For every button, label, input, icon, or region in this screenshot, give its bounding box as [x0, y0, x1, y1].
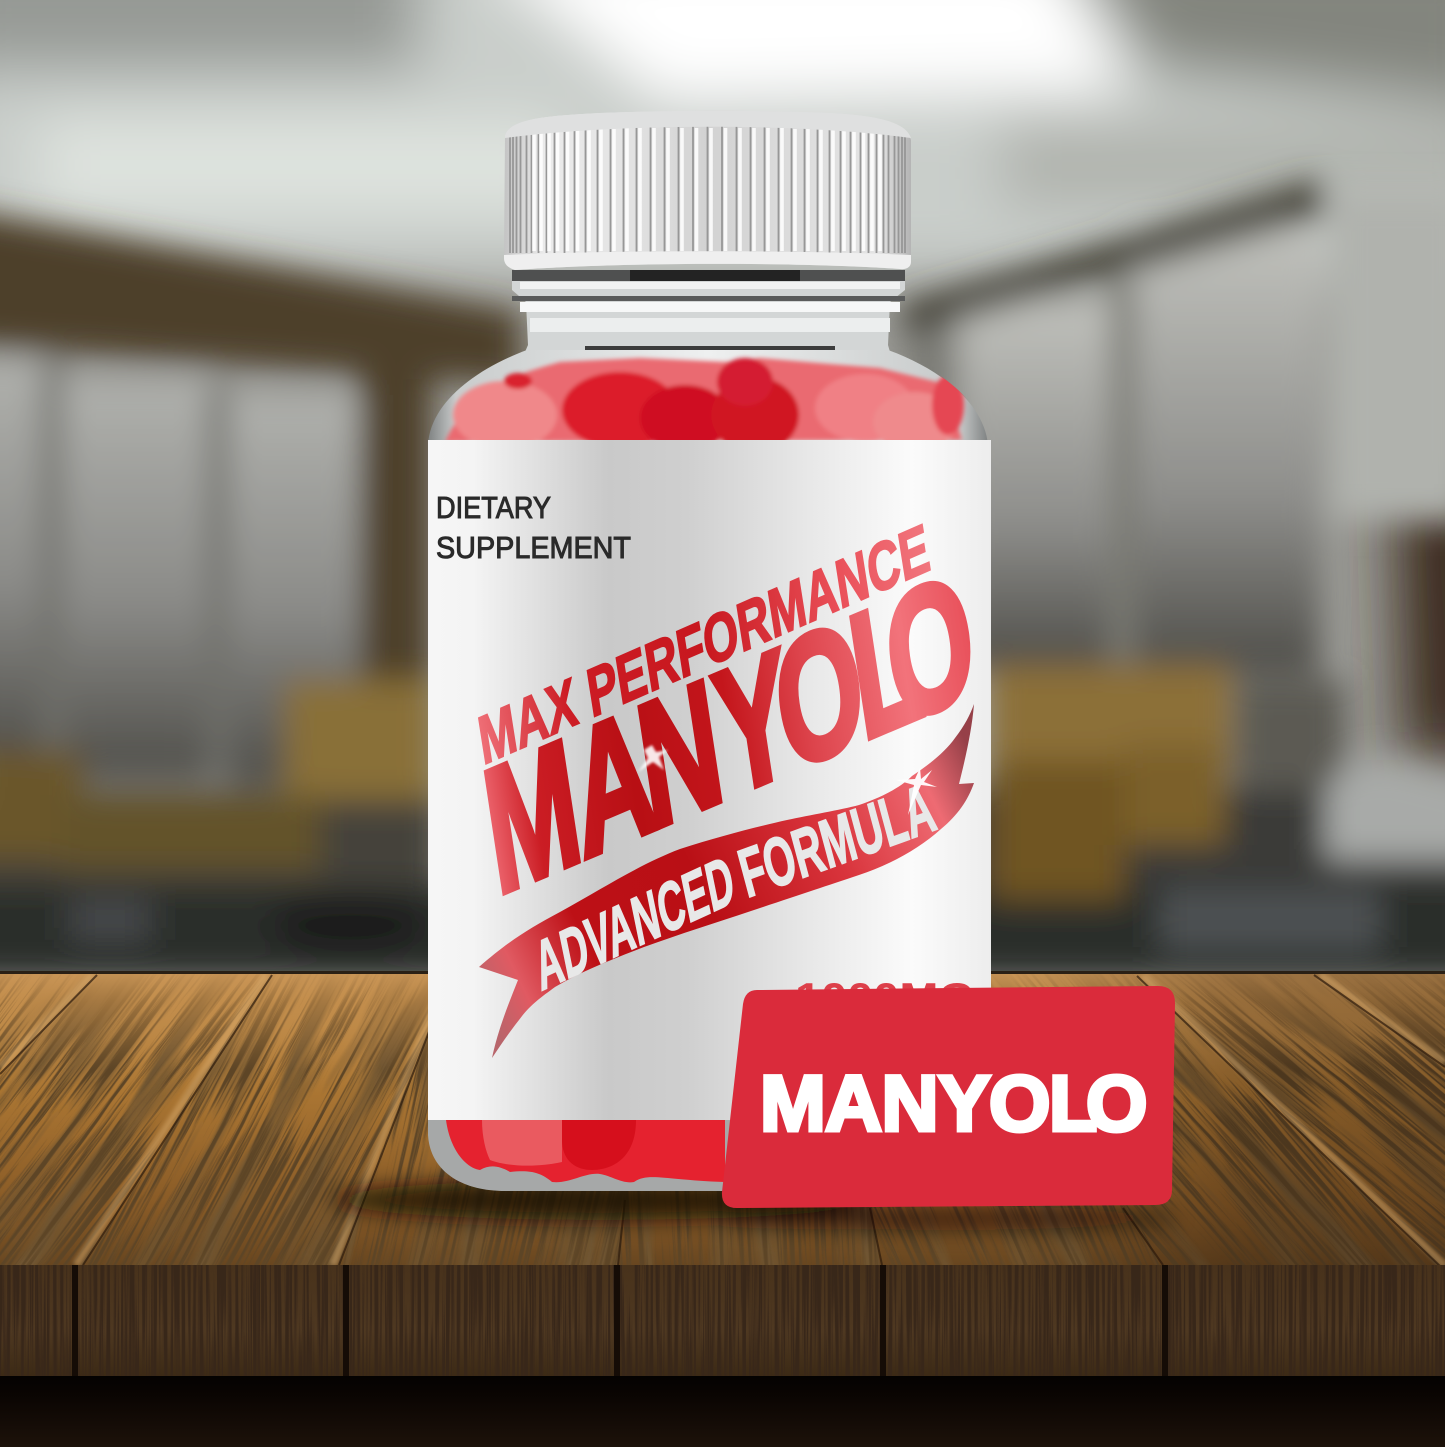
table back edge	[0, 971, 1445, 974]
wooden table	[0, 971, 1445, 1447]
ribbon word: formula: FORMULA	[731, 770, 943, 913]
underside shadow	[0, 1376, 1445, 1447]
bottle shadow on table	[330, 1180, 1180, 1230]
ribbon text: advanced formula	[529, 770, 943, 1006]
glass neck	[510, 270, 910, 352]
plank seams	[0, 975, 1445, 1268]
bottom of bottle with gummies	[428, 1118, 760, 1191]
card body	[722, 986, 1175, 1208]
label text: 1000mg: 1000MG	[795, 974, 975, 1021]
cap ribs shadow	[510, 126, 905, 253]
label text: dietary supplement: DIETARY	[436, 490, 551, 525]
supplement bottle	[428, 111, 991, 1191]
ribbon word: advanced: ADVANCED	[529, 841, 740, 1006]
bottle cap	[504, 111, 911, 270]
sparkles	[638, 745, 937, 815]
table front edge	[0, 1265, 1445, 1376]
red ribbon	[479, 704, 974, 1058]
glass shoulder	[428, 350, 988, 445]
bottle label	[428, 440, 991, 1120]
table top	[0, 974, 1445, 1265]
card logo text: MANYOLO	[760, 1058, 1147, 1148]
red manyolo card	[722, 986, 1175, 1208]
label text: dietary supplement: SUPPLEMENT	[436, 530, 631, 565]
top gummies	[445, 358, 964, 453]
label text: max performance: MAX PERFORMANCE	[474, 510, 934, 780]
cap ribs highlight	[534, 128, 880, 251]
cap top rim	[505, 111, 911, 138]
label text: manyolo logo: MANYOLO	[473, 533, 986, 933]
blurred room background	[0, 0, 1445, 980]
cap bottom rim	[504, 251, 911, 270]
